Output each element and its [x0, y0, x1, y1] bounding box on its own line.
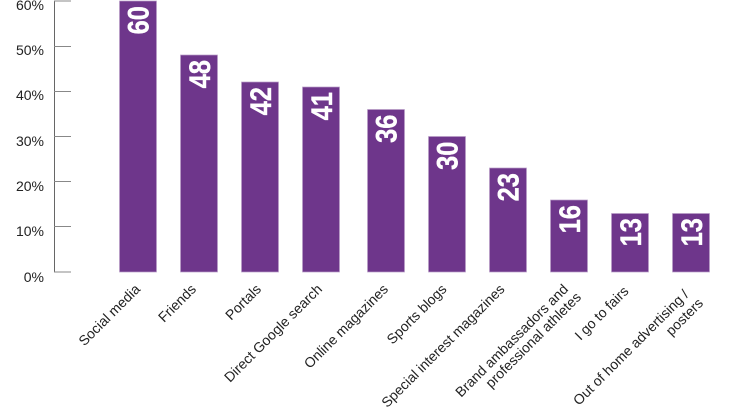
bar: Sports blogs 30: 30 — [431, 142, 464, 170]
category labels: Direct Google search — [221, 281, 325, 385]
bar: Portals 42 — [242, 82, 278, 272]
bar: Online magazines 36 — [368, 110, 404, 272]
category labels: professional athletes — [482, 289, 584, 391]
bar: Out of home 13 — [672, 214, 710, 272]
category labels: Out of home advertising / — [570, 286, 692, 408]
category labels: Brand ambassadors and — [452, 281, 571, 400]
bar: Friends 48 — [180, 55, 218, 272]
bar: Direct Google search 41: 41 — [305, 92, 338, 120]
category labels: Friends — [155, 281, 199, 325]
category labels — [75, 281, 706, 410]
bar: Out of home 13: 13 — [675, 218, 708, 246]
bar: Special interest magazines 23 — [490, 168, 526, 272]
category labels: Social media — [75, 281, 143, 349]
bar: Social media 60: 60 — [122, 6, 155, 34]
category labels: I go to fairs — [571, 283, 632, 343]
category labels: Portals — [222, 281, 264, 323]
bar: Brand ambassadors 16: 16 — [553, 205, 586, 233]
bar: Online magazines 36: 36 — [370, 114, 403, 143]
y axis: 10% — [16, 223, 44, 239]
bar: Social media 60 — [120, 1, 156, 272]
bar: Sports blogs 30 — [428, 136, 466, 272]
bar: Special interest magazines 23: 23 — [492, 173, 525, 201]
category labels: Online magazines — [301, 281, 391, 371]
bar: Brand ambassadors 16 — [550, 200, 588, 272]
y axis: 20% — [16, 178, 44, 194]
bar: Direct Google search 41 — [302, 87, 340, 272]
y axis: 30% — [16, 133, 44, 149]
bars — [120, 1, 710, 272]
y axis: 40% — [16, 87, 44, 103]
bar: I go to fairs 13 — [612, 214, 648, 272]
bar: Portals 42: 42 — [244, 87, 277, 115]
category labels: Special interest magazines — [378, 281, 508, 410]
y axis: 0% — [24, 269, 44, 285]
y axis — [16, 0, 71, 285]
bar: I go to fairs 13: 13 — [614, 218, 647, 246]
category labels: Sports blogs — [383, 281, 450, 347]
bar: Friends 48: 48 — [183, 60, 216, 88]
category labels: posters — [662, 295, 706, 339]
y axis: 50% — [16, 42, 44, 58]
